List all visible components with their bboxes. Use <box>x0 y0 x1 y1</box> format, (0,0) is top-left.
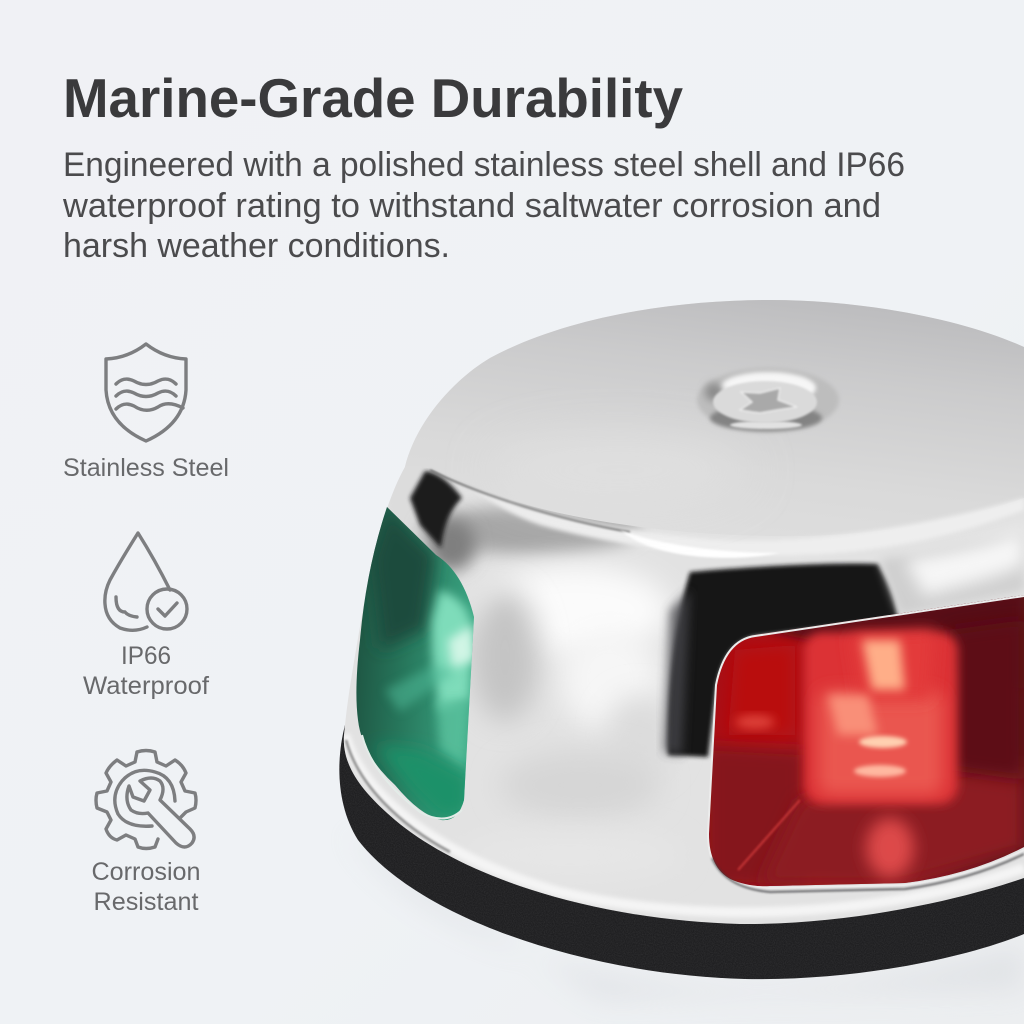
red lens <box>700 590 1024 890</box>
stainless steel body <box>344 457 1024 924</box>
description text: harsh weather conditions. <box>63 227 450 265</box>
LED bulb <box>804 632 958 804</box>
label: IP66 waterproof: IP66 <box>121 642 171 670</box>
description text: Engineered with a polished stainless steel shell and IP66 <box>63 146 905 184</box>
feature: stainless steel <box>63 344 229 482</box>
icon: shield with waves <box>106 344 186 441</box>
navigation light product <box>330 300 1024 1000</box>
icon: gear with wrench <box>96 750 196 848</box>
dark reflection: top-left <box>410 471 462 548</box>
chrome tones <box>397 470 404 483</box>
label: corrosion resistant: Corrosion <box>92 858 200 886</box>
green lens edge <box>362 735 462 819</box>
feature: IP66 waterproof: Waterproof <box>83 672 209 700</box>
right chrome <box>874 555 1024 614</box>
cap rim highlight <box>470 488 1024 555</box>
red lens edge <box>708 596 1024 888</box>
soft shadow <box>345 830 1024 1000</box>
title: Marine-Grade Durability <box>63 67 683 129</box>
label: stainless steel: Stainless Steel <box>63 454 229 482</box>
feature: corrosion resistant: Resistant <box>94 888 199 916</box>
screw recess <box>697 368 839 432</box>
top cap <box>405 300 1024 536</box>
description text: waterproof rating to withstand saltwater corrosion and <box>62 187 881 225</box>
green lens <box>356 507 474 820</box>
lower rim light <box>345 735 1024 912</box>
description text <box>62 146 905 265</box>
black rubber gasket <box>330 720 1024 985</box>
feature: corrosion resistant <box>92 750 200 916</box>
feature: IP66 waterproof <box>83 533 209 700</box>
dark reflection: center <box>668 564 898 757</box>
screw drive <box>740 388 797 413</box>
cap lighter glow <box>490 436 750 504</box>
screw <box>697 368 839 432</box>
icon: water drop with check <box>105 533 187 630</box>
